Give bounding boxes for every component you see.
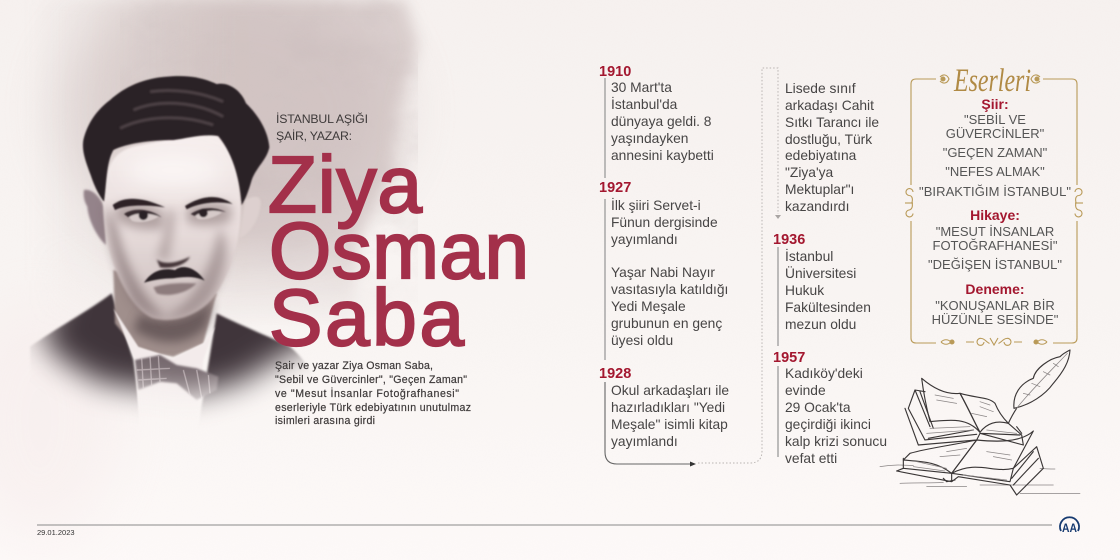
timeline 1928 continued: Mektuplar"ı bbox=[785, 182, 854, 197]
title: name: Saba bbox=[269, 273, 464, 362]
intro paragraph: Şair ve yazar Ziya Osman Saba, bbox=[275, 360, 433, 372]
timeline 1910 bbox=[599, 64, 714, 163]
timeline 1928 continued: kazandırdı bbox=[785, 199, 849, 214]
nose bbox=[157, 210, 190, 268]
subtitle bbox=[276, 111, 368, 143]
ear left bbox=[84, 190, 106, 245]
essay list: HÜZÜNLE SESİNDE" bbox=[932, 312, 1059, 327]
timeline 1957: vefat etti bbox=[785, 451, 837, 466]
timeline 1927: 1927 bbox=[599, 180, 631, 196]
forehead highlight bbox=[135, 158, 212, 188]
footer rule bbox=[37, 524, 1052, 526]
shirt collar and front bbox=[113, 308, 216, 408]
timeline 1927: İlk şiiri Servet-i bbox=[611, 196, 701, 213]
intro paragraph bbox=[275, 360, 471, 427]
date: 29.01.2023 bbox=[37, 528, 75, 537]
story list: Hikaye: bbox=[970, 207, 1020, 223]
ornamental frame bbox=[905, 75, 1083, 345]
ear right bbox=[242, 198, 260, 230]
timeline 1927: Yaşar Nabi Nayır bbox=[611, 265, 715, 280]
eyebrow left bbox=[113, 199, 165, 210]
timeline 1957: 29 Ocak'ta bbox=[785, 400, 851, 415]
subtitle: İSTANBUL AŞIĞI bbox=[276, 111, 368, 126]
timeline 1957: kalp krizi sonucu bbox=[785, 434, 887, 449]
poetry list: Şiir: bbox=[981, 96, 1009, 112]
subtitle: ŞAİR, YAZAR: bbox=[276, 129, 352, 143]
eyebrow right bbox=[185, 197, 233, 209]
timeline connector lines bbox=[605, 68, 781, 466]
timeline 1927: Fünun dergisinde bbox=[611, 215, 718, 230]
title: name: Ziya bbox=[268, 140, 422, 229]
story list: "MESUT İNSANLAR bbox=[936, 224, 1054, 239]
timeline 1936 bbox=[773, 232, 871, 332]
timeline 1928 continued: edebiyatına bbox=[785, 148, 857, 163]
icon: books and quill bbox=[880, 350, 1080, 495]
hair bbox=[83, 76, 269, 205]
essay list: "KONUŞANLAR BİR bbox=[935, 298, 1055, 313]
poetry list: "BIRAKTIĞIM İSTANBUL" bbox=[919, 184, 1071, 199]
timeline 1957: geçirdiği ikinci bbox=[785, 417, 871, 432]
timeline 1927: vasıtasıyla katıldığı bbox=[611, 282, 728, 297]
story list: FOTOĞRAFHANESİ" bbox=[932, 238, 1058, 253]
suit jacket bbox=[30, 292, 308, 416]
timeline 1957: Kadıköy'deki bbox=[785, 366, 863, 381]
timeline 1928 continued: dostluğu, Türk bbox=[785, 132, 872, 147]
timeline 1928 bbox=[599, 366, 729, 449]
timeline 1928 continued: arkadaşı Cahit bbox=[785, 98, 874, 113]
timeline 1928 continued bbox=[785, 81, 879, 214]
timeline 1928: hazırladıkları "Yedi bbox=[611, 400, 725, 415]
timeline 1910: yaşındayken bbox=[611, 131, 688, 146]
timeline 1910: dünyaya geldi. 8 bbox=[611, 114, 712, 129]
title: name bbox=[268, 140, 529, 362]
timeline 1927: yayımlandı bbox=[611, 232, 678, 247]
eye left bbox=[124, 210, 162, 222]
background paper bbox=[2, 0, 1116, 376]
timeline 1910: İstanbul'da bbox=[611, 95, 678, 112]
timeline 1910: annesini kaybetti bbox=[611, 148, 714, 163]
intro paragraph: eserleriyle Türk edebiyatının unutulmaz bbox=[275, 402, 471, 414]
story list bbox=[928, 207, 1062, 272]
poetry list bbox=[919, 96, 1071, 199]
timeline 1928: Meşale" isimli kitap bbox=[611, 417, 728, 432]
logo: AA bbox=[1060, 517, 1079, 535]
face bbox=[103, 135, 241, 320]
neck bbox=[113, 270, 217, 357]
poetry list: "NEFES ALMAK" bbox=[945, 164, 1045, 179]
timeline 1936: mezun oldu bbox=[785, 317, 856, 332]
timeline 1928: Okul arkadaşları ile bbox=[611, 383, 729, 398]
timeline 1928 continued: Lisede sınıf bbox=[785, 81, 856, 96]
timeline 1910: 1910 bbox=[599, 64, 631, 80]
title: name: Osman bbox=[269, 206, 529, 295]
eye right bbox=[191, 208, 226, 219]
timeline 1928 continued: Sıtkı Tarancı ile bbox=[785, 115, 879, 130]
timeline 1928: yayımlandı bbox=[611, 434, 678, 449]
timeline 1936: İstanbul bbox=[785, 247, 833, 264]
poetry list: GÜVERCİNLER" bbox=[946, 126, 1045, 141]
poetry list: "SEBİL VE bbox=[964, 112, 1026, 127]
face shading left bbox=[104, 203, 167, 320]
timeline 1910: 30 Mart'ta bbox=[611, 80, 672, 95]
timeline 1957: 1957 bbox=[773, 350, 805, 366]
essay list: Deneme: bbox=[965, 281, 1025, 297]
panel: Eserleri works frame bbox=[905, 63, 1083, 345]
timeline 1936: Üniversitesi bbox=[785, 264, 856, 281]
timeline 1927: üyesi oldu bbox=[611, 333, 673, 348]
essay list bbox=[932, 281, 1059, 327]
intro paragraph: ve "Mesut İnsanlar Fotoğrafhanesi" bbox=[275, 387, 459, 400]
moustache bbox=[144, 267, 205, 283]
mouth bbox=[153, 283, 197, 295]
timeline 1927 bbox=[599, 180, 728, 348]
portrait photograph bbox=[30, 74, 308, 416]
timeline 1927: Yedi Meşale bbox=[611, 299, 686, 314]
timeline 1936: Hukuk bbox=[785, 283, 824, 298]
panel heading: Eserleri bbox=[953, 63, 1031, 99]
timeline 1957 bbox=[773, 350, 887, 466]
logo: AA: AA bbox=[1062, 521, 1077, 535]
intro paragraph: "Sebil ve Güvercinler", "Geçen Zaman" bbox=[275, 374, 467, 386]
timeline 1928 continued: "Ziya'ya bbox=[785, 165, 833, 180]
timeline 1928: 1928 bbox=[599, 366, 631, 382]
timeline 1936: 1936 bbox=[773, 232, 805, 248]
eye socket shading bbox=[115, 202, 232, 230]
bow tie bbox=[135, 355, 218, 400]
intro paragraph: isimleri arasına girdi bbox=[275, 415, 375, 427]
story list: "DEĞİŞEN İSTANBUL" bbox=[928, 257, 1062, 272]
timeline 1957: evinde bbox=[785, 383, 826, 398]
timeline 1927: grubunun en genç bbox=[611, 316, 722, 331]
poetry list: "GEÇEN ZAMAN" bbox=[943, 145, 1048, 160]
timeline 1936: Fakültesinden bbox=[785, 300, 871, 315]
